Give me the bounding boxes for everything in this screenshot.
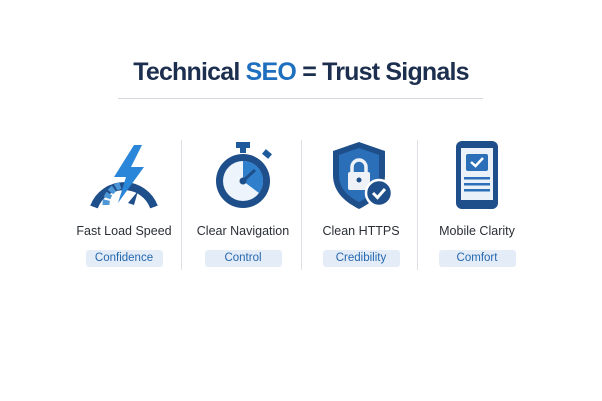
pill: Control <box>224 252 262 264</box>
label: Mobile Clarity <box>439 224 515 238</box>
column: mobile clarity <box>439 141 516 267</box>
label: Clear Navigation <box>197 224 289 238</box>
icon: speedometer <box>90 145 158 208</box>
pill <box>86 250 162 267</box>
icon: stopwatch <box>216 142 272 208</box>
label: Clean HTTPS <box>322 224 400 238</box>
pill <box>204 250 282 267</box>
icon: tablet <box>456 141 498 209</box>
pill: Credibility <box>336 252 386 264</box>
pill <box>322 250 400 267</box>
icon: shield lock <box>333 142 391 209</box>
column: fast load speed <box>76 145 172 267</box>
column: clean https <box>322 142 400 267</box>
pill: Confidence <box>95 252 153 264</box>
label: Fast Load Speed <box>76 224 172 238</box>
title: Technical SEO = Trust Signals <box>133 58 469 86</box>
column: clear navigation <box>197 142 289 267</box>
pill: Comfort <box>457 252 497 264</box>
pill <box>438 250 516 267</box>
